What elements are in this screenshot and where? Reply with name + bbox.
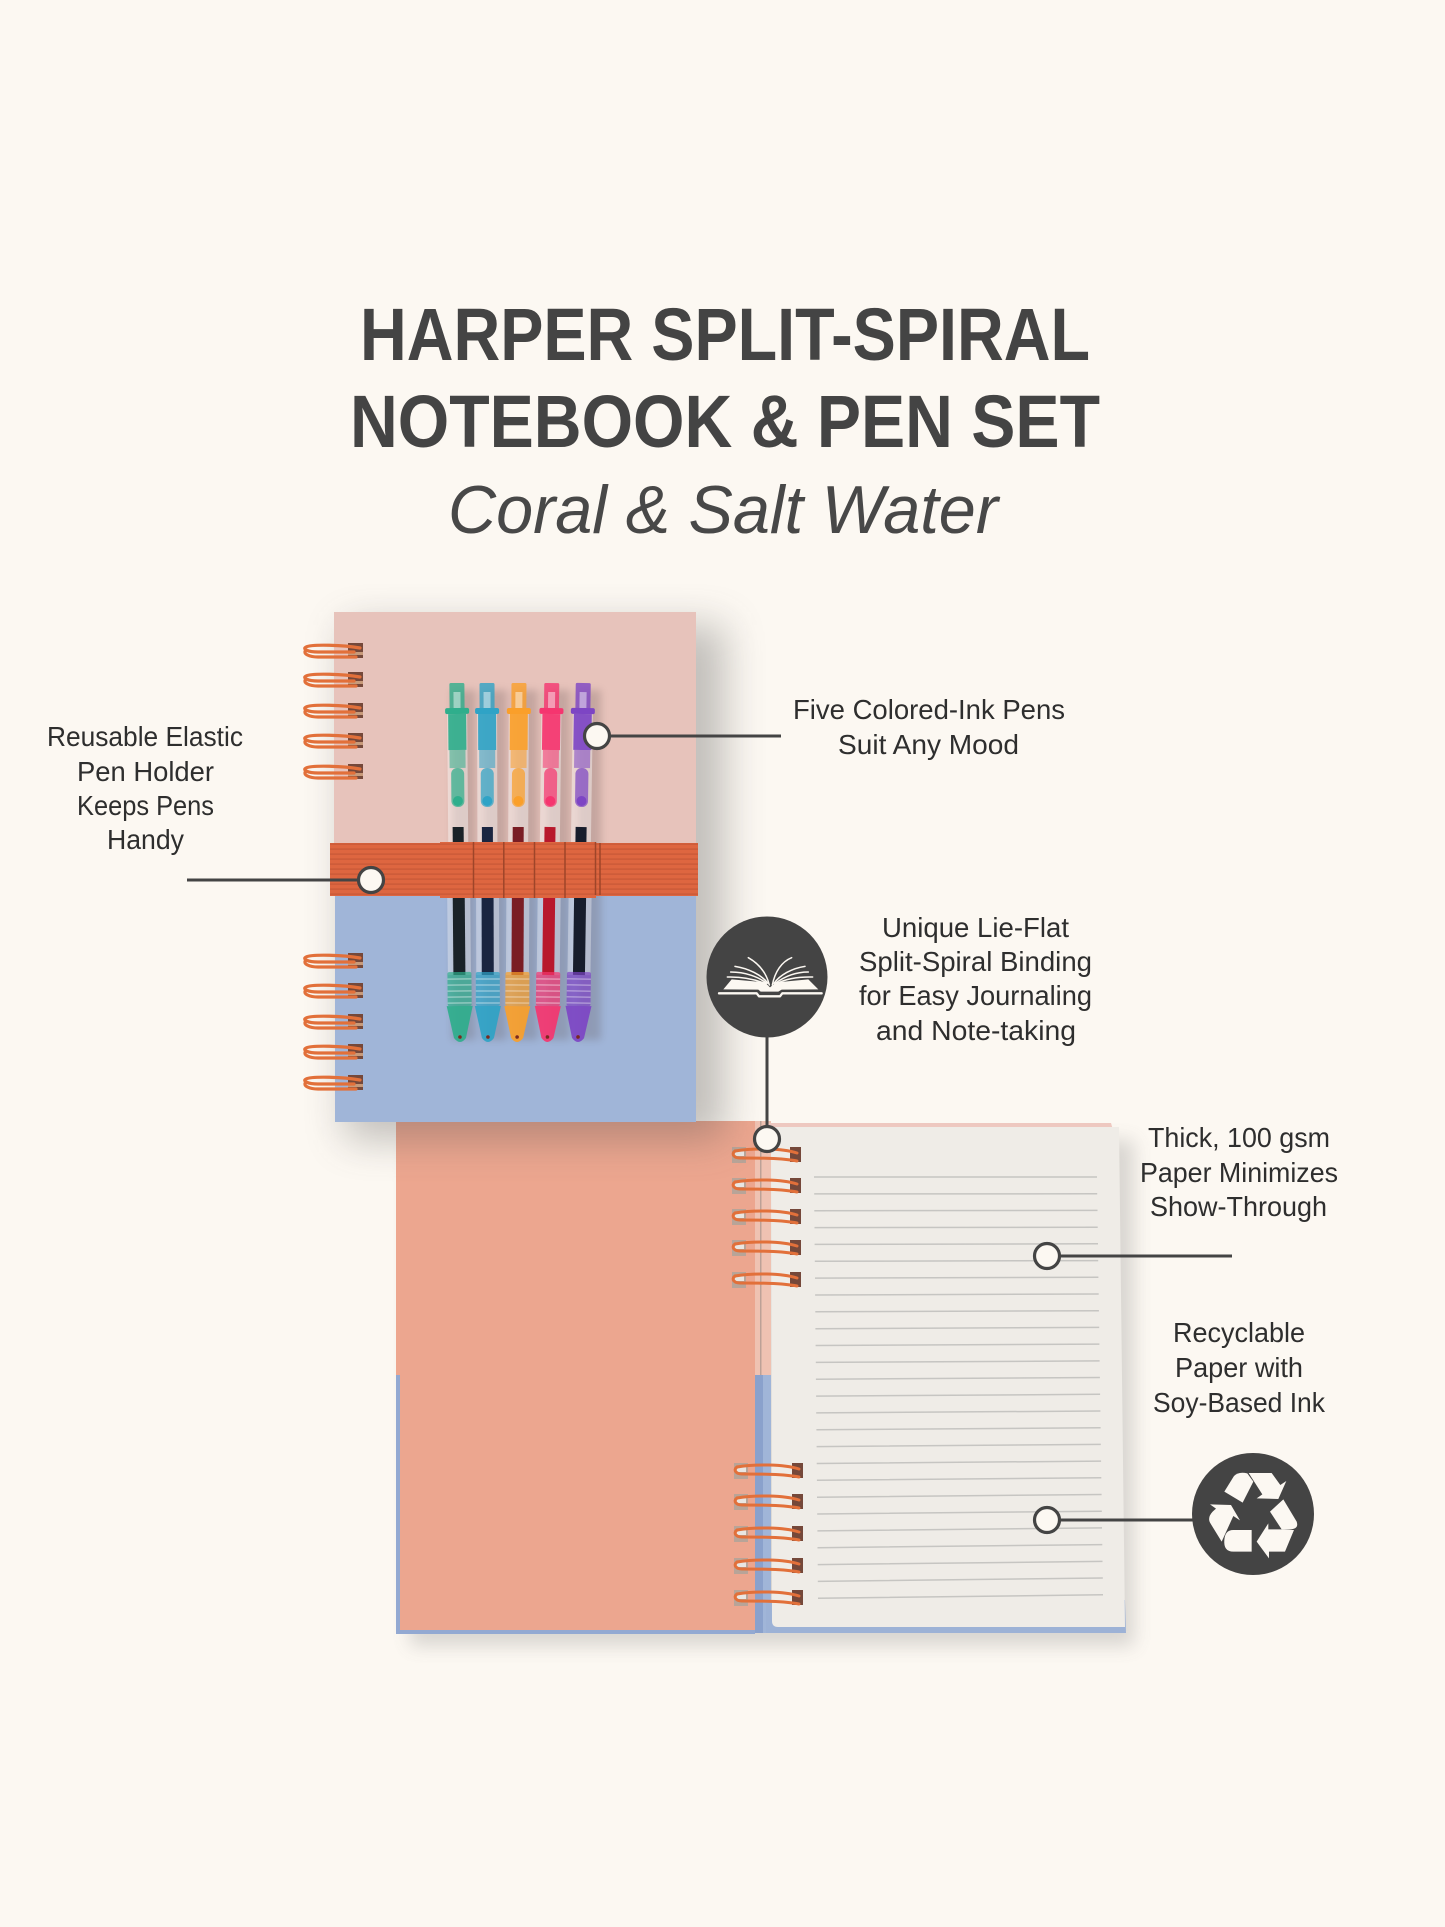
text: Paper Minimizes — [1140, 1157, 1338, 1188]
title: HARPER SPLIT-SPIRAL — [360, 293, 1090, 376]
text: Split-Spiral Binding — [859, 946, 1092, 977]
text: Thick, 100 gsm — [1148, 1122, 1330, 1153]
orange pen — [504, 683, 532, 1042]
text — [859, 912, 1092, 1046]
callout: colored-ink pens — [584, 694, 1065, 760]
marker — [358, 868, 384, 892]
marker — [754, 1126, 780, 1152]
pink pen — [534, 683, 565, 1042]
closed notebook — [305, 612, 725, 1140]
callout: thick paper — [1034, 1122, 1338, 1268]
lower rings — [305, 953, 363, 1090]
text: Show-Through — [1150, 1191, 1327, 1222]
text: Five Colored-Ink Pens — [793, 694, 1065, 725]
leader line — [1058, 1254, 1232, 1258]
title: NOTEBOOK & PEN SET — [350, 380, 1100, 463]
callout: elastic pen holder — [47, 721, 384, 892]
leader line — [766, 1030, 768, 1128]
marker — [584, 724, 610, 748]
pink cover — [334, 612, 696, 896]
leader line — [608, 734, 781, 738]
text: Suit Any Mood — [838, 729, 1019, 760]
lower binding rings — [734, 1463, 803, 1606]
marker — [1034, 1508, 1060, 1532]
text: Paper with — [1175, 1352, 1303, 1383]
text — [793, 694, 1065, 760]
left inside cover — [396, 1121, 755, 1634]
ruled lines — [814, 1177, 1103, 1598]
text — [47, 721, 243, 855]
blue cover — [335, 895, 696, 1122]
icon: recycle — [1192, 1453, 1314, 1575]
leader line — [1058, 1518, 1195, 1522]
subtitle: Coral & Salt Water — [448, 472, 1000, 548]
text — [1140, 1122, 1338, 1222]
text: Soy-Based Ink — [1153, 1387, 1326, 1418]
text — [1153, 1317, 1326, 1418]
callout: recyclable paper — [1034, 1317, 1326, 1575]
five pens — [444, 683, 596, 1042]
text: Recyclable — [1173, 1317, 1305, 1348]
lined page — [771, 1127, 1125, 1627]
text: Handy — [107, 824, 184, 855]
callout: lie-flat binding — [706, 912, 1092, 1152]
text: Unique Lie-Flat — [882, 912, 1069, 943]
icon: open book — [706, 916, 828, 1038]
closed notebook shadow — [345, 625, 725, 1140]
green pen — [444, 683, 473, 1042]
open notebook shadow — [410, 1140, 1134, 1646]
upper rings — [305, 643, 363, 779]
blue pen — [474, 683, 501, 1042]
text: for Easy Journaling — [859, 980, 1092, 1011]
right cover edge — [768, 1123, 1113, 1130]
leader line — [187, 878, 360, 882]
elastic band — [330, 842, 698, 898]
upper binding rings — [732, 1147, 801, 1288]
spine — [755, 1121, 771, 1633]
text: Reusable Elastic — [47, 721, 243, 752]
open notebook — [396, 1121, 1134, 1646]
text: Pen Holder — [77, 756, 214, 787]
pen shadows — [452, 690, 601, 1040]
text: Keeps Pens — [77, 790, 214, 821]
text: and Note-taking — [876, 1015, 1076, 1046]
title — [350, 293, 1100, 463]
marker — [1034, 1244, 1060, 1268]
purple pen — [565, 683, 596, 1042]
